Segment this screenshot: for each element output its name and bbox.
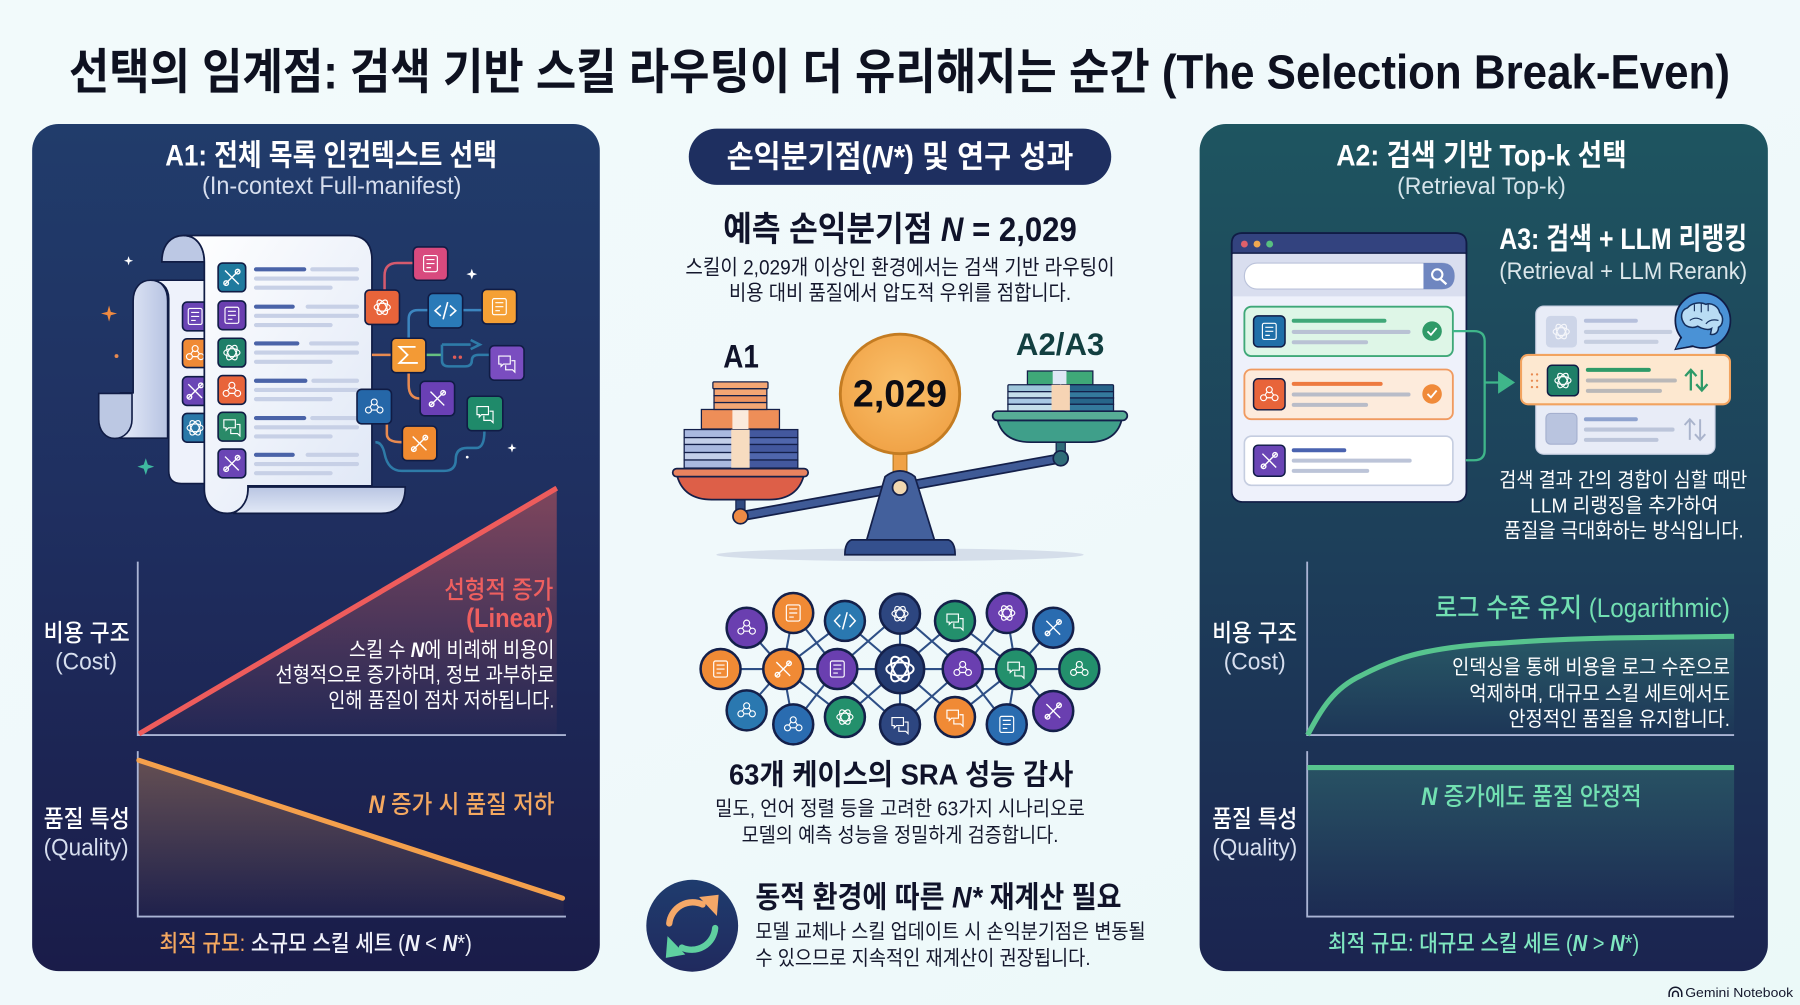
recalculation heading: 동적 환경에 따른 N* 재계산 필요 — [755, 881, 1122, 914]
sparkles — [101, 256, 517, 475]
tile glyphs — [366, 256, 515, 451]
left pan stem — [736, 494, 745, 517]
coin — [840, 334, 960, 482]
log description: 인덱싱을 통해 비용을 로그 수준으로 — [1452, 656, 1730, 679]
network glyphs — [714, 604, 1088, 734]
recalculation description: 수 있으므로 지속적인 재계산이 권장됩니다. — [755, 947, 1091, 970]
audit description — [715, 797, 1085, 847]
result card 3 — [1244, 436, 1453, 485]
cost description: 인해 품질이 점차 저하됩니다. — [328, 689, 554, 713]
A1 heading: A1: 전체 목록 인컨텍스트 선택 — [165, 139, 497, 172]
icon: manifest scroll document — [99, 235, 405, 513]
icon: recalculation refresh — [646, 880, 738, 972]
break-even description: 스킬이 2,029개 이상인 환경에서는 검색 기반 라우팅이 — [685, 256, 1115, 280]
network edges — [721, 613, 1079, 725]
quality sublabel: (Quality) — [44, 835, 129, 862]
connectors — [372, 263, 489, 471]
cost sublabel: (Cost) — [55, 649, 117, 676]
network nodes — [701, 593, 1099, 744]
linear label: 선형적 증가 — [444, 576, 553, 604]
skill tiles — [357, 247, 524, 461]
optimal scale A1: 최적 규모: 소규모 스킬 세트 (N < N*) — [160, 930, 472, 956]
A3 description — [1499, 469, 1747, 543]
coin: 2,029 — [853, 374, 947, 416]
beam — [740, 458, 1061, 516]
left stack A1 — [684, 382, 798, 468]
result card 1 — [1244, 307, 1453, 356]
icon: balance scale — [673, 327, 1127, 561]
break-even description: 비용 대비 품질에서 압도적 우위를 점합니다. — [729, 281, 1071, 305]
cost description: 선형적으로 증가하며, 정보 과부하로 — [276, 663, 554, 687]
icon: search browser window — [1232, 233, 1466, 502]
icon: brain bubble — [1675, 293, 1730, 349]
panel: center column — [646, 129, 1146, 972]
break-even heading: 예측 손익분기점 N = 2,029 — [723, 211, 1077, 249]
arrow: results to rerank — [1453, 331, 1513, 460]
label A2/A3: A2/A3 — [1016, 327, 1104, 362]
rerank highlighted row — [1521, 355, 1730, 404]
main scroll page — [162, 235, 405, 513]
audit description: 모델의 예측 성능을 정밀하게 검증합니다. — [742, 824, 1058, 847]
fulcrum — [867, 471, 934, 540]
chart: quality falling — [44, 751, 566, 917]
log description — [1452, 656, 1730, 731]
icon: rerank list — [1521, 293, 1730, 454]
log label: 로그 수준 유지 (Logarithmic) — [1435, 593, 1730, 623]
log description: 억제하며, 대규모 스킬 세트에서도 — [1469, 683, 1730, 706]
cost label: 비용 구조 — [1212, 620, 1297, 647]
right stack A2/A3 — [1008, 371, 1114, 411]
A2 heading: A2: 검색 기반 Top-k 선택 — [1336, 139, 1627, 172]
recalculation description: 모델 교체나 스킬 업데이트 시 손익분기점은 변동될 — [755, 920, 1146, 943]
chart: cost linear — [44, 487, 566, 735]
audit description: 밀도, 언어 정렬 등을 고려한 63가지 시나리오로 — [715, 797, 1085, 820]
right pan stem — [1056, 436, 1065, 459]
left pan — [673, 469, 808, 500]
rerank row 3 — [1546, 413, 1705, 444]
A3 description: 품질을 극대화하는 방식입니다. — [1504, 520, 1744, 543]
watermark: Gemini Notebook: Gemini Notebook — [1685, 985, 1794, 1000]
panel: A1 full manifest — [32, 124, 600, 971]
label A1: A1 — [723, 339, 759, 375]
cost sublabel: (Cost) — [1224, 649, 1286, 676]
quality label: 품질 특성 — [1212, 806, 1297, 833]
A2 subheading: (Retrieval Top-k) — [1397, 173, 1566, 200]
cost description — [276, 638, 554, 713]
A3 subheading: (Retrieval + LLM Rerank) — [1499, 258, 1747, 285]
quality annotation: N 증가 시 품질 저하 — [368, 791, 554, 819]
cost label: 비용 구조 — [44, 620, 130, 647]
network diagram — [701, 593, 1099, 744]
result card 2 — [1244, 369, 1453, 419]
recalculation description — [755, 920, 1146, 970]
center header pill: 손익분기점(N*) 및 연구 성과 — [727, 140, 1073, 175]
linear label english: (Linear) — [466, 603, 553, 633]
A3 heading: A3: 검색 + LLM 리랭킹 — [1499, 223, 1747, 256]
panel: A2 retrieval top-k — [1200, 124, 1768, 971]
A1 subheading: (In-context Full-manifest) — [202, 172, 461, 200]
right pan — [993, 411, 1127, 442]
rerank row 1 — [1546, 316, 1670, 347]
quality label: 품질 특성 — [44, 806, 130, 833]
break-even description — [685, 256, 1115, 305]
A3 description: 검색 결과 간의 경합이 심할 때만 — [1499, 469, 1747, 492]
cost description: 스킬 수 N에 비례해 비용이 — [349, 638, 554, 662]
list rows — [218, 263, 357, 478]
icon: skill connectors and tiles — [101, 247, 524, 475]
center header pill — [689, 129, 1111, 185]
chart: quality stable — [1212, 751, 1734, 917]
back scroll page — [99, 280, 209, 484]
log description: 안정적인 품질을 유지합니다. — [1508, 708, 1730, 731]
optimal scale A2: 최적 규모: 대규모 스킬 세트 (N > N*) — [1328, 930, 1639, 956]
quality sublabel: (Quality) — [1212, 835, 1297, 862]
A3 description: LLM 리랭징을 추가하여 — [1530, 494, 1718, 517]
chart: cost logarithmic — [1212, 562, 1734, 735]
search bar — [1244, 263, 1454, 289]
audit heading: 63개 케이스의 SRA 성능 감사 — [729, 759, 1073, 791]
quality annotation: N 증가에도 품질 안정적 — [1421, 783, 1642, 811]
